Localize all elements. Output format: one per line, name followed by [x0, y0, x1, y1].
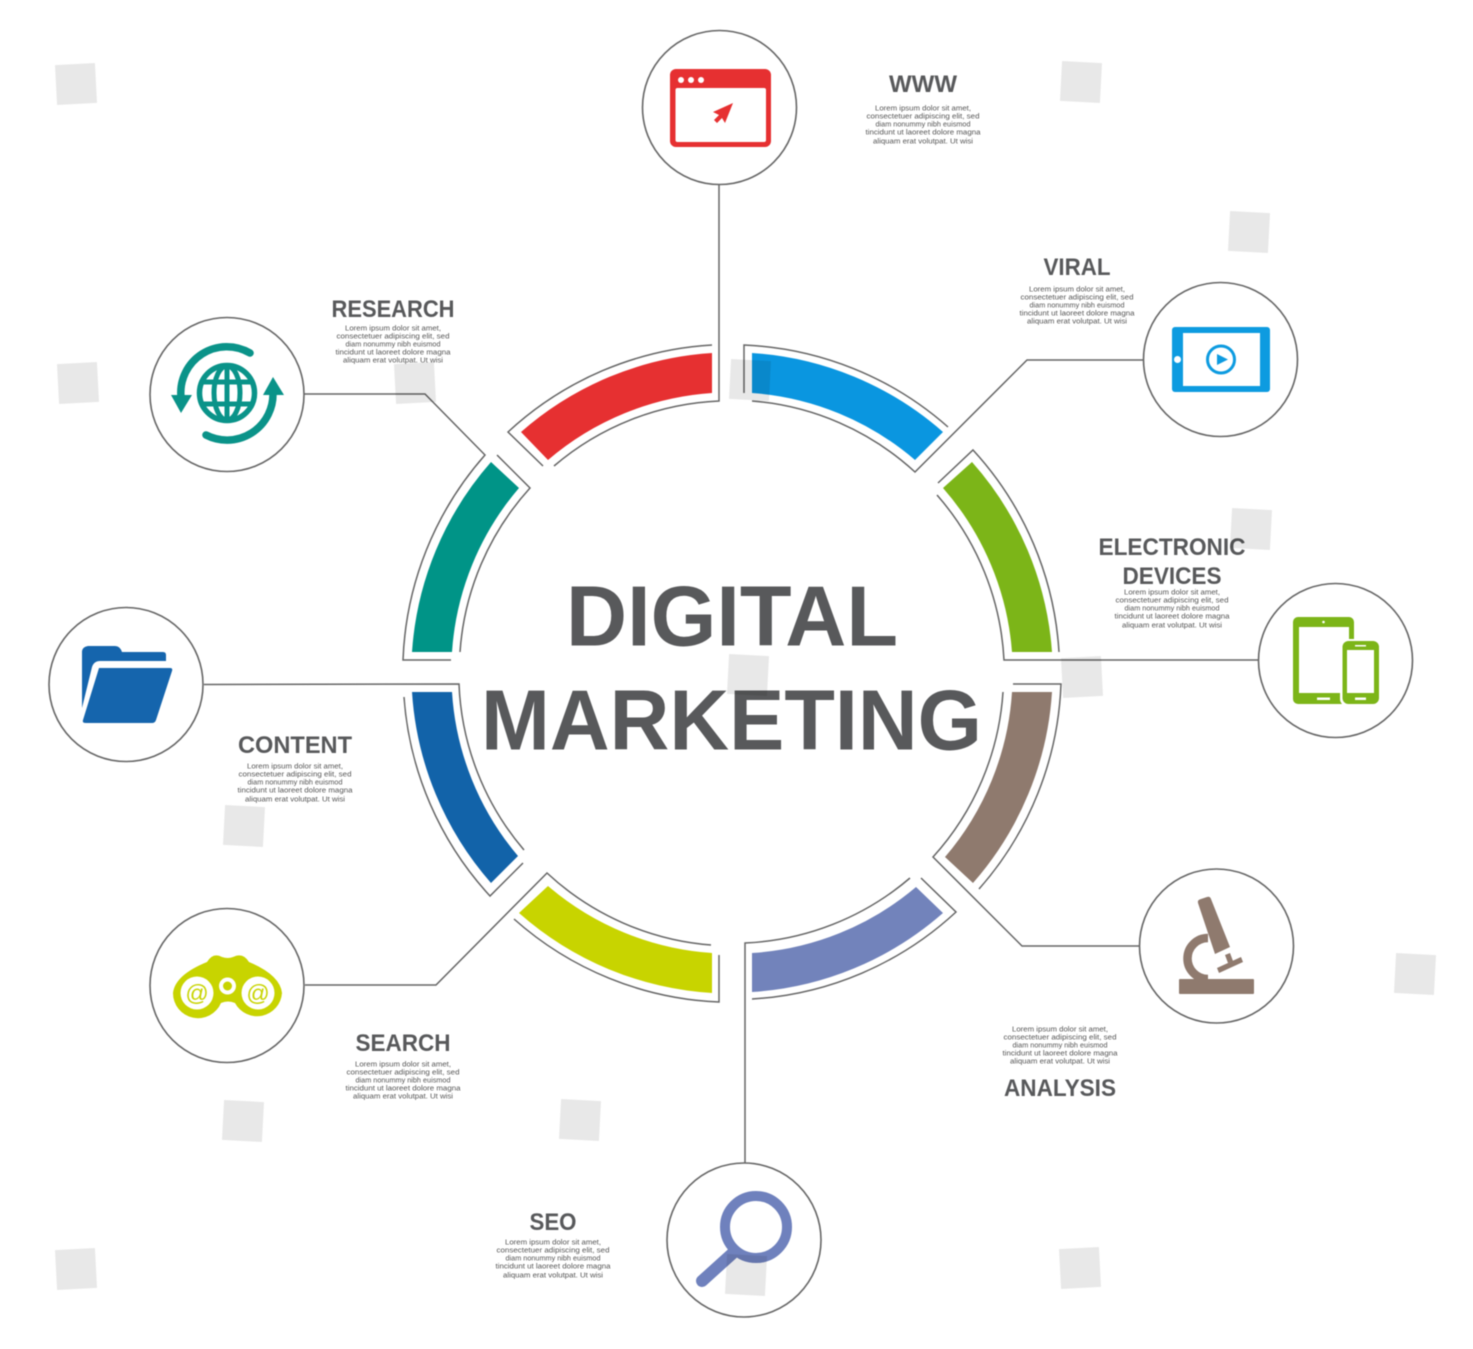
node: viral	[1020, 254, 1298, 436]
body text	[1002, 1024, 1118, 1066]
body text: diam nonummy nibh euismod	[1030, 300, 1124, 310]
body text: diam nonummy nibh euismod	[876, 120, 970, 128]
body text: diam nonummy nibh euismod	[1012, 1040, 1108, 1050]
circle	[150, 318, 304, 472]
body text: consectetuer adipiscing elit, sed	[1004, 1032, 1116, 1042]
icon: browser window with cursor	[670, 69, 771, 147]
heading: VIRAL	[1044, 254, 1110, 281]
circle	[667, 1163, 821, 1317]
heading: SEARCH	[356, 1030, 450, 1057]
body text	[336, 324, 451, 364]
icon: tablet with play button	[1172, 327, 1270, 392]
node: analysis	[1002, 869, 1294, 1102]
body text: tincidunt ut laoreet dolore magna	[866, 128, 981, 136]
body text	[1114, 588, 1230, 630]
body text: aliquam erat volutpat. Ut wisi	[343, 356, 443, 364]
body text: consectetuer adipiscing elit, sed	[496, 1246, 610, 1254]
body text: aliquam erat volutpat. Ut wisi	[503, 1270, 603, 1280]
node: search	[150, 908, 461, 1100]
body text: consectetuer adipiscing elit, sed	[346, 1068, 460, 1076]
icon: binoculars with at signs: @	[246, 980, 270, 1006]
body text: diam nonummy nibh euismod	[248, 778, 342, 786]
node: www	[642, 30, 981, 184]
title line: marketing: MARKETING	[481, 674, 982, 768]
body text	[866, 104, 981, 146]
heading: ELECTRONIC	[1098, 534, 1246, 561]
body text: Lorem ipsum dolor sit amet,	[1124, 588, 1220, 596]
body text: aliquam erat volutpat. Ut wisi	[1010, 1056, 1110, 1066]
body text: aliquam erat volutpat. Ut wisi	[1027, 316, 1127, 326]
body text: Lorem ipsum dolor sit amet,	[505, 1238, 601, 1246]
body text: aliquam erat volutpat. Ut wisi	[245, 794, 345, 804]
connector: www	[508, 185, 719, 466]
circle	[642, 30, 796, 184]
body text: diam nonummy nibh euismod	[356, 1076, 450, 1084]
body text: Lorem ipsum dolor sit amet,	[1029, 284, 1125, 294]
body text: tincidunt ut laoreet dolore magna	[496, 1262, 611, 1270]
connector: content	[204, 684, 524, 896]
body text: aliquam erat volutpat. Ut wisi	[873, 136, 973, 146]
icon: microscope	[1179, 897, 1254, 994]
circle	[1258, 584, 1412, 738]
heading	[1098, 534, 1246, 590]
heading: ANALYSIS	[1004, 1075, 1116, 1102]
body text: aliquam erat volutpat. Ut wisi	[353, 1092, 453, 1100]
circle	[150, 908, 304, 1062]
ring of eight coloured segments	[412, 353, 1052, 993]
heading: CONTENT	[238, 732, 352, 759]
title line: digital: DIGITAL	[566, 570, 898, 664]
icon: globe with circular arrows	[171, 347, 284, 440]
segment: search (yellow)	[519, 886, 712, 993]
body text: Lorem ipsum dolor sit amet,	[345, 324, 441, 332]
icon: binoculars with at signs: @	[185, 980, 209, 1006]
segment outlines and connector lines	[204, 185, 1258, 1163]
heading: WWW	[889, 71, 957, 98]
icon: open folder	[82, 646, 172, 723]
connector: seo	[745, 878, 956, 1163]
heading: DEVICES	[1122, 563, 1222, 590]
segment: seo (periwinkle)	[752, 887, 943, 992]
body text: consectetuer adipiscing elit, sed	[1020, 292, 1134, 302]
title	[481, 570, 982, 768]
body text: tincidunt ut laoreet dolore magna	[336, 348, 451, 356]
body text	[238, 762, 353, 804]
body text: tincidunt ut laoreet dolore magna	[1002, 1048, 1118, 1058]
body text: diam nonummy nibh euismod	[346, 340, 440, 348]
segment: viral (blue)	[752, 353, 943, 460]
segment: electronic devices (green)	[943, 462, 1052, 652]
body text: consectetuer adipiscing elit, sed	[866, 112, 980, 120]
connector: viral	[744, 345, 1144, 472]
body text: Lorem ipsum dolor sit amet,	[355, 1060, 451, 1068]
node: seo	[496, 1163, 821, 1317]
segment: www (red)	[521, 353, 712, 460]
body text: Lorem ipsum dolor sit amet,	[875, 104, 971, 112]
body text: tincidunt ut laoreet dolore magna	[1114, 612, 1230, 620]
circle	[1140, 869, 1294, 1023]
node: electronic devices	[1098, 534, 1412, 738]
icon: magnifying glass	[702, 1196, 787, 1281]
body text: consectetuer adipiscing elit, sed	[1116, 596, 1228, 604]
icon: binoculars with at signs	[173, 955, 282, 1018]
body text: aliquam erat volutpat. Ut wisi	[1122, 620, 1222, 630]
body text: Lorem ipsum dolor sit amet,	[1012, 1024, 1108, 1034]
body text: consectetuer adipiscing elit, sed	[336, 332, 450, 340]
circle	[1144, 282, 1298, 436]
icon: tablet and phone	[1293, 617, 1381, 706]
body text	[496, 1238, 611, 1280]
body text: tincidunt ut laoreet dolore magna	[1020, 308, 1135, 318]
body text: diam nonummy nibh euismod	[1124, 604, 1220, 612]
connector: research	[304, 394, 530, 660]
segment: analysis (brown)	[945, 692, 1052, 883]
body text	[346, 1060, 461, 1100]
heading: SEO	[530, 1209, 576, 1236]
body text	[1020, 284, 1135, 326]
body text: Lorem ipsum dolor sit amet,	[247, 762, 343, 770]
node: research	[150, 296, 454, 472]
circle	[49, 608, 203, 762]
body text: tincidunt ut laoreet dolore magna	[346, 1084, 461, 1092]
node: content	[49, 608, 353, 804]
body text: diam nonummy nibh euismod	[506, 1254, 600, 1262]
connector: analysis	[933, 684, 1139, 946]
segment: research (teal)	[412, 462, 519, 652]
body text: tincidunt ut laoreet dolore magna	[238, 786, 353, 794]
heading: RESEARCH	[332, 296, 454, 323]
connector: search	[305, 873, 719, 1002]
body text: consectetuer adipiscing elit, sed	[238, 770, 352, 778]
connector: electronic devices	[937, 450, 1258, 660]
segment: content (dark blue)	[412, 692, 518, 883]
